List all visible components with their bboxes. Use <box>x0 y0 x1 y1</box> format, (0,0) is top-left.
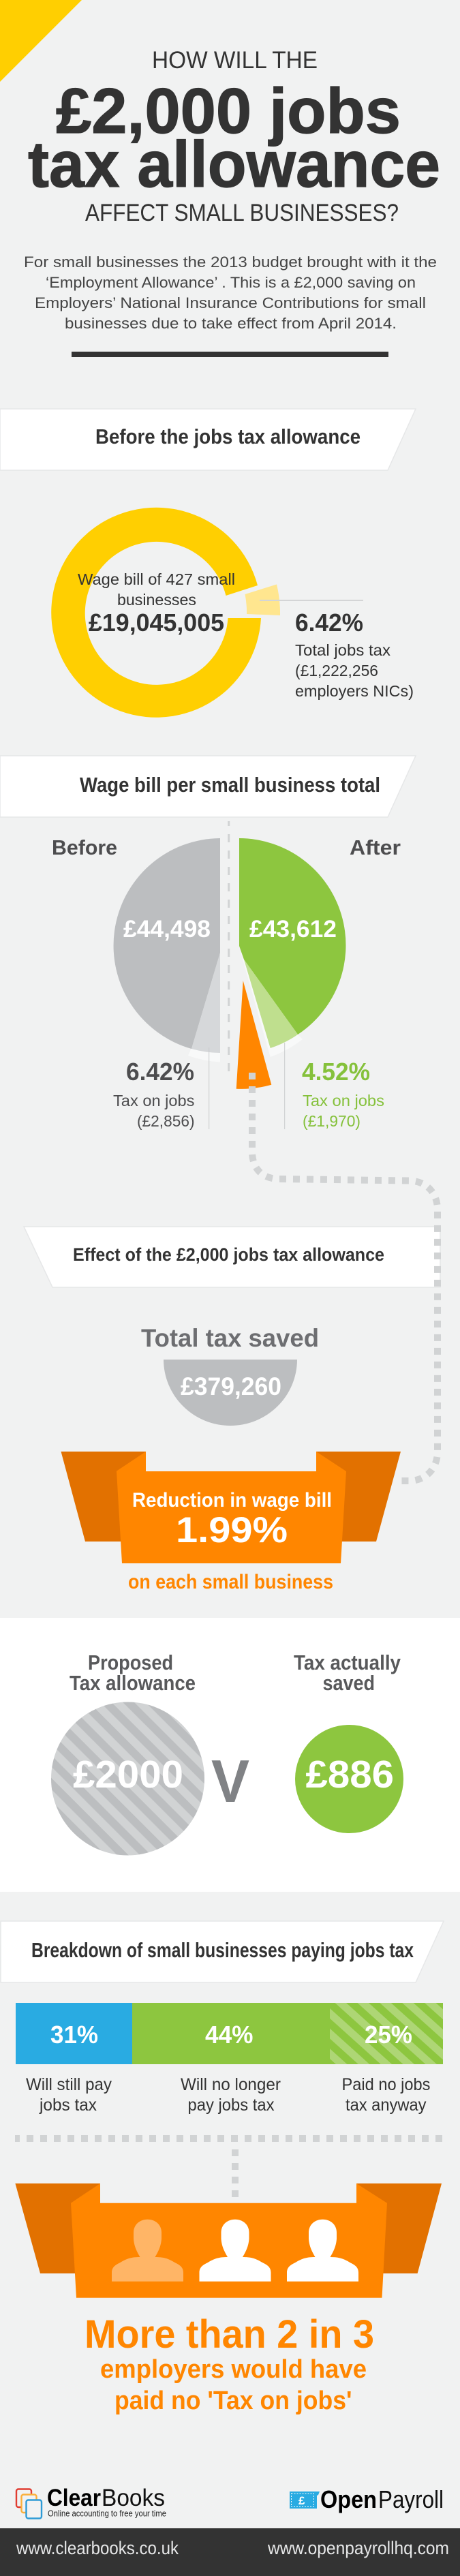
title <box>28 47 440 226</box>
donut callout: 6.42%: Total jobs tax <box>295 641 391 659</box>
icon: person white <box>199 2220 271 2282</box>
donut centre label: £19,045,005 <box>89 609 224 637</box>
title: HOW WILL THE <box>152 47 318 74</box>
panel: wage bill per small business <box>0 756 416 1130</box>
footer bar <box>0 2528 460 2576</box>
panel: effect of the allowance <box>24 1073 440 1593</box>
heading: total tax saved: Total tax saved <box>141 1323 319 1352</box>
banner: before the jobs tax allowance: Before the jobs tax allowance <box>95 425 361 448</box>
intro text: ‘Employment Allowance’ . This is a £2,000 saving on <box>46 274 416 291</box>
ribbon: reduction in wage bill: 1.99% <box>176 1510 288 1550</box>
donut callout: 6.42%: employers NICs) <box>295 682 414 700</box>
panel: breakdown <box>1 1921 444 2415</box>
logo: ClearBooks: Online accounting to free your time <box>48 2509 166 2519</box>
conclusion text: employers would have <box>100 2355 367 2384</box>
ribbon: reduction in wage bill: Reduction in wage bill <box>132 1489 332 1512</box>
bar label: will still pay: jobs tax <box>39 2096 97 2115</box>
donut centre label: Wage bill of 427 small <box>78 570 235 588</box>
versus mark: V <box>211 1747 249 1815</box>
bar label: will still pay <box>26 2075 112 2115</box>
heading: proposed tax allowance: Tax allowance <box>70 1671 196 1695</box>
white panel background <box>0 1618 460 1892</box>
logo: ClearBooks: Clear <box>47 2485 101 2511</box>
title: tax allowance <box>28 128 440 201</box>
callout: before tax on jobs <box>113 1047 209 1130</box>
donut callout: 6.42%: (£1,222,256 <box>295 662 378 679</box>
donut callout: 6.42%: 6.42% <box>295 609 363 637</box>
divider rule <box>72 352 388 357</box>
conclusion text: More than 2 in 3 <box>85 2312 374 2357</box>
donut chart <box>51 508 363 718</box>
callout: after tax on jobs: 4.52% <box>302 1058 370 1086</box>
conclusion text: paid no 'Tax on jobs' <box>114 2387 352 2415</box>
banner: effect of the allowance <box>24 1227 440 1287</box>
half circle: £379,260 <box>164 1360 297 1426</box>
icon: payslip: £ <box>298 2494 305 2507</box>
bar label: will no longer pay: Will no longer <box>181 2075 281 2094</box>
heading: proposed tax allowance: Proposed <box>88 1651 173 1674</box>
green circle: £886: £886 <box>305 1753 394 1796</box>
donut centre label: businesses <box>117 591 196 609</box>
icon: person white second <box>287 2220 358 2282</box>
icon: payslip <box>290 2491 320 2509</box>
callout: after tax on jobs: Tax on jobs <box>303 1092 384 1109</box>
heading: after: After <box>350 835 401 859</box>
pie: before: £44,498 <box>123 916 211 942</box>
callout: before tax on jobs: (£2,856) <box>137 1112 195 1130</box>
banner: wage bill per small business total <box>0 756 416 817</box>
intro text: Employers’ National Insurance Contributions for small <box>35 294 426 311</box>
donut callout: 6.42% <box>295 609 414 700</box>
bar label: paid no jobs tax <box>342 2075 431 2115</box>
logo: OpenPayroll: Payroll <box>378 2485 444 2513</box>
callout: after tax on jobs: (£1,970) <box>303 1112 361 1130</box>
bar label: will still pay: Will still pay <box>26 2075 112 2094</box>
title: £2,000 jobs <box>56 75 401 147</box>
caption: on each small business: on each small business <box>128 1571 333 1593</box>
icon: stacked pages <box>16 2489 42 2519</box>
centre dashed divider <box>228 821 230 1072</box>
corner triangle <box>0 0 82 82</box>
heading: before: Before <box>52 835 117 859</box>
title: AFFECT SMALL BUSINESSES? <box>85 200 399 226</box>
bar label: will no longer pay <box>181 2075 281 2115</box>
pie: before <box>114 838 220 1062</box>
dotted bracket <box>15 2138 443 2197</box>
heading: tax actually saved: saved <box>323 1671 375 1695</box>
intro text: businesses due to take effect from April 2014. <box>65 315 397 332</box>
bar label: will no longer pay: pay jobs tax <box>188 2096 275 2115</box>
conclusion text <box>85 2312 374 2415</box>
logo: ClearBooks <box>16 2485 166 2519</box>
heading: tax actually saved: Tax actually <box>294 1651 401 1674</box>
pie: after <box>239 838 346 1057</box>
footer bar: www.clearbooks.co.uk <box>16 2538 179 2558</box>
callout: before tax on jobs: 6.42% <box>126 1058 194 1086</box>
panel: before the jobs tax allowance <box>0 409 416 718</box>
green circle: £886 <box>295 1725 403 1833</box>
logo: OpenPayroll: Open <box>320 2485 377 2513</box>
stacked bar: 44% <box>205 2021 254 2049</box>
callout: after tax on jobs <box>285 1043 384 1130</box>
banner: before the jobs tax allowance <box>0 409 416 470</box>
striped circle: £2000 <box>51 1702 204 1855</box>
icon: person faded <box>112 2220 183 2282</box>
donut centre label <box>78 570 235 637</box>
banner: effect of the allowance: Effect of the £2,000 jobs tax allowance <box>73 1244 384 1265</box>
intro text: For small businesses the 2013 budget brought with it the <box>24 254 437 271</box>
orange saving wedge <box>236 981 271 1089</box>
bar label: paid no jobs tax: Paid no jobs <box>342 2075 431 2094</box>
heading: proposed tax allowance <box>70 1651 196 1695</box>
ribbon: reduction in wage bill <box>61 1452 401 1563</box>
panel: proposed versus actual <box>0 1618 460 1892</box>
stacked bar: 31% <box>50 2021 98 2049</box>
dotted connector <box>252 1073 438 1481</box>
heading: tax actually saved <box>294 1651 401 1695</box>
half circle: £379,260: £379,260 <box>181 1373 281 1400</box>
pie: after: £43,612 <box>249 916 337 942</box>
ribbon with people <box>15 2183 442 2298</box>
callout: before tax on jobs: Tax on jobs <box>113 1092 195 1109</box>
striped circle: £2000: £2000 <box>73 1753 183 1796</box>
logo: ClearBooks: Books <box>102 2485 165 2511</box>
logo: OpenPayroll <box>290 2485 444 2513</box>
intro text <box>24 254 437 332</box>
stacked bar: 25% <box>365 2021 412 2049</box>
banner: wage bill per small business total: Wage bill per small business total <box>80 773 380 797</box>
stacked bar <box>16 2003 443 2064</box>
bar label: paid no jobs tax: tax anyway <box>346 2096 427 2115</box>
banner: breakdown <box>1 1921 444 1982</box>
